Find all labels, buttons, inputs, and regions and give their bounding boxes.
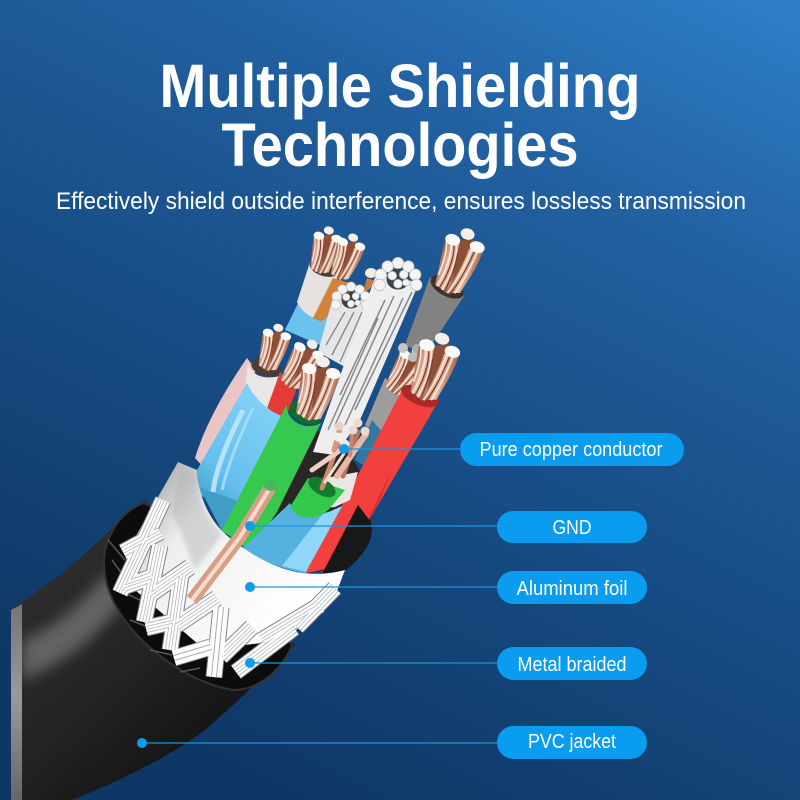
leader lines: [142, 449, 499, 743]
callout: aluminum foil: [497, 571, 647, 604]
wire: large red: [303, 327, 464, 574]
callout: metal braided: Metal braided: [518, 654, 626, 676]
wire: grey: [405, 222, 489, 355]
callout: metal braided: [497, 647, 647, 680]
GND drain wire: [192, 481, 278, 600]
callout: aluminum foil: Aluminum foil: [516, 578, 628, 600]
wire: small white behind green: [305, 472, 358, 510]
mini copper bundle: [312, 418, 370, 488]
cut opening inside the shield: [197, 424, 371, 572]
wire: light blue with white inner, top left: [285, 224, 344, 345]
wire: small red: [265, 333, 329, 420]
title: Multiple Shielding: [160, 52, 640, 120]
title: [160, 52, 640, 179]
cable jacket: [11, 500, 295, 800]
wire: pink: [195, 358, 256, 480]
wire: orange: [313, 229, 378, 322]
callout: PVC jacket: [497, 726, 647, 759]
callout: GND: GND: [552, 517, 592, 539]
wire: lower blue: [243, 503, 343, 573]
wire: steel strands large: [313, 257, 422, 455]
callout: pure copper conductor: Pure copper conductor: [480, 439, 663, 461]
callout dots: [137, 444, 349, 748]
subtitle: Effectively shield outside interference, ensures lossless transmission: [56, 188, 746, 215]
metal braid: [120, 500, 335, 677]
callout: PVC jacket: PVC jacket: [528, 731, 616, 753]
wire: steel strands small: [318, 282, 371, 367]
wire: large light blue: [197, 383, 282, 512]
wire: large green: [222, 352, 344, 552]
inner shadow on foil: [172, 470, 222, 570]
dark gap at right of shield: [322, 505, 372, 574]
wire: white with copper: [246, 321, 294, 418]
braid strands overlapping drain wire: [174, 607, 221, 677]
wire: grey behind red: [355, 341, 433, 470]
wire: small green: [290, 473, 345, 518]
aluminum foil: [125, 462, 345, 650]
title: Technologies: [222, 111, 578, 179]
cable illustration: [11, 222, 489, 800]
callout: GND: [497, 511, 647, 543]
callout: pure copper conductor: [460, 433, 684, 466]
